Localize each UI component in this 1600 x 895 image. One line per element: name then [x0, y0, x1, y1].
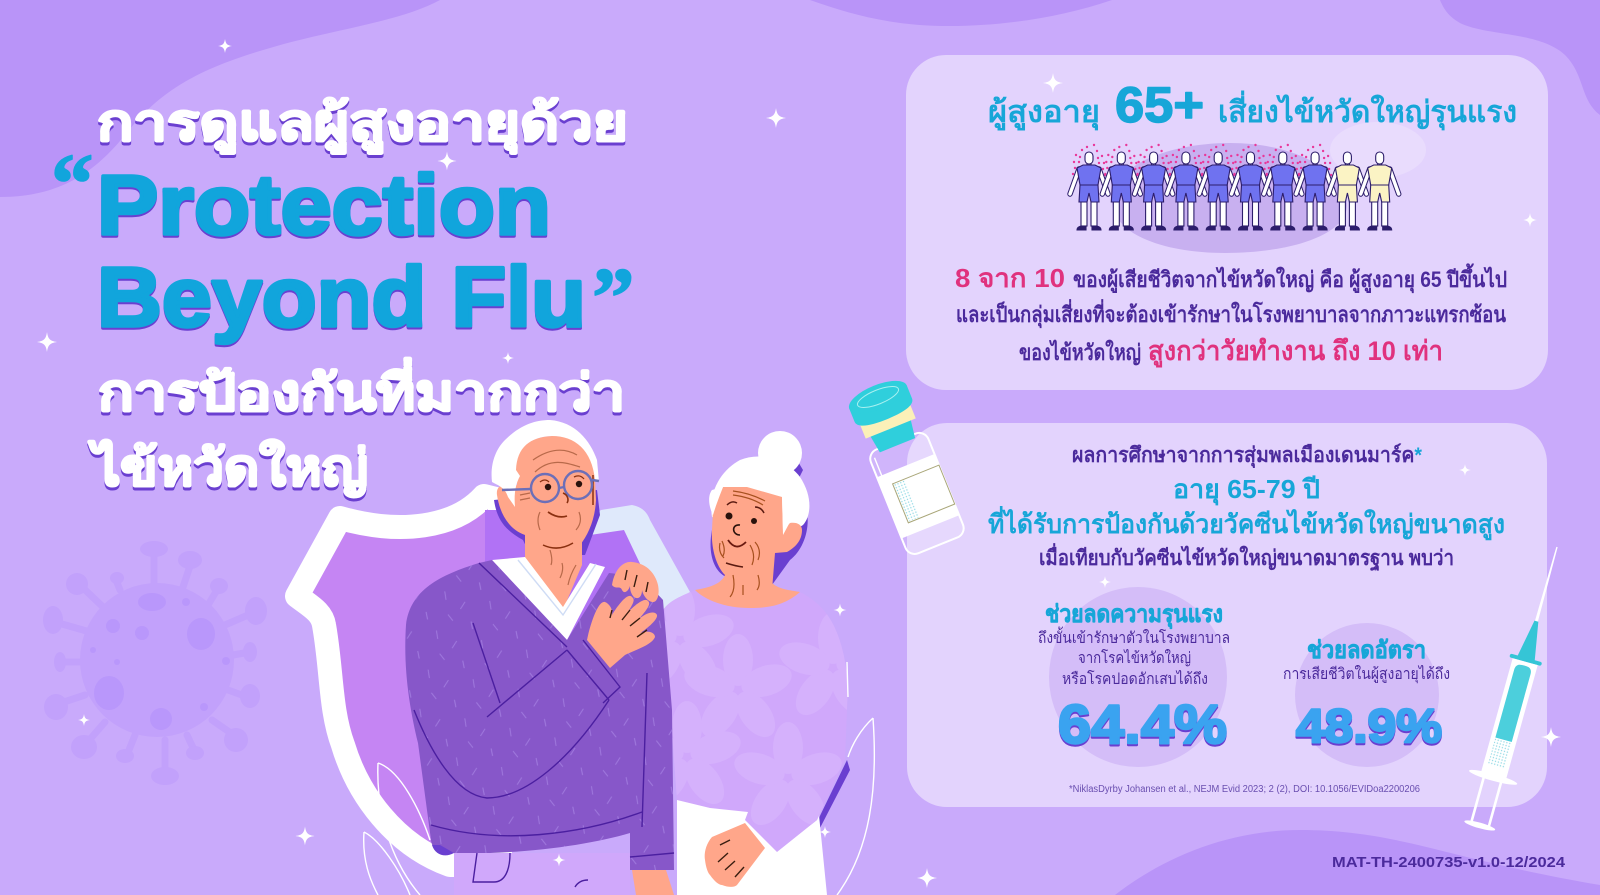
stat: severity reduction 64.4%: หรือโรคปอดอักเสบได้ถึง — [1062, 670, 1208, 688]
material code: MAT-TH-2400735-v1.0-12/2024 — [1332, 855, 1565, 871]
heading: 65+ risk: เสี่ยงไข้หวัดใหญ่รุนแรง — [1218, 90, 1517, 131]
text: study description: ผลการศึกษาจากการสุ่มพลเมืองเดนมาร์ค* — [1072, 443, 1423, 469]
leaf outlines: left — [364, 763, 430, 895]
background blob: top left — [0, 0, 440, 197]
text: study description: อายุ 65-79 ปี — [1173, 474, 1320, 506]
stat: mortality reduction 48.9%: 48.9% — [1296, 699, 1442, 752]
title: main heading: Beyond Flu — [97, 250, 586, 344]
text: study description: เมื่อเทียบกับวัคซีนไข้หวัดใหญ่ขนาดมาตรฐาน พบว่า — [1039, 542, 1454, 572]
text: study description: ที่ได้รับการป้องกันด้วยวัคซีนไข้หวัดใหญ่ขนาดสูง — [988, 505, 1505, 541]
panel: risk panel — [906, 55, 1548, 390]
stat: severity reduction 64.4%: จากโรคไข้หวัดใหญ่ — [1078, 649, 1191, 667]
text: risk statement: ของไข้หวัดใหญ่ — [1019, 339, 1141, 366]
title: main heading: Protection — [97, 158, 551, 252]
shield — [297, 496, 690, 865]
stat: mortality reduction 48.9%: ช่วยลดอัตรา — [1307, 637, 1426, 664]
heading: 65+ risk — [988, 77, 1517, 133]
soft highlight in risk panel — [1330, 122, 1426, 178]
text: risk statement: 8 จาก 10 — [955, 263, 1065, 293]
heading: 65+ risk: 65+ — [1115, 77, 1204, 133]
title: main heading — [51, 95, 634, 497]
stat: severity reduction 64.4%: ช่วยลดความรุนแรง — [1045, 601, 1223, 630]
illustration: woman — [664, 431, 850, 895]
background blob: top centre — [810, 0, 1112, 26]
stat: severity reduction 64.4%: 64.4% — [1058, 693, 1227, 755]
stat: mortality reduction 48.9% — [1283, 623, 1450, 767]
text: risk statement: และเป็นกลุ่มเสี่ยงที่จะต้องเข้ารักษาในโรงพยาบาลจากภาวะแทรกซ้อน — [956, 298, 1506, 329]
title: main heading: ” — [592, 251, 634, 345]
heading: 65+ risk: ผู้สูงอายุ — [988, 96, 1100, 131]
footnote: *NiklasDyrby Johansen et al., NEJM Evid 2023; 2 (2), DOI: 10.1056/EVIDoa2200206 — [1069, 784, 1420, 795]
text: study description — [988, 443, 1505, 572]
title: main heading: การดูแลผู้สูงอายุด้วย — [97, 95, 628, 154]
text: risk statement: ของผู้เสียชีวิตจากไข้หวัดใหญ่ คือ ผู้สูงอายุ 65 ปีขึ้นไป — [1073, 263, 1507, 294]
title: main heading: “ — [51, 137, 94, 231]
icon: virus — [43, 541, 267, 785]
pictogram: 8 of 10 people at risk — [1070, 144, 1399, 230]
title: main heading: ไข้หวัดใหญ่ — [88, 439, 368, 497]
background blob: top right — [1440, 0, 1600, 115]
background blob: bottom right — [1115, 830, 1600, 895]
leaf outlines: right — [837, 662, 874, 895]
stat: severity reduction 64.4% — [1038, 587, 1230, 767]
panel: study panel — [907, 423, 1547, 807]
stat: severity reduction 64.4%: ถึงขั้นเข้ารักษาตัวในโรงพยาบาล — [1038, 626, 1230, 647]
text: risk statement: สูงกว่าวัยทำงาน ถึง 10 เท่า — [1148, 336, 1443, 368]
illustration: man — [405, 420, 674, 895]
title: main heading: การป้องกันที่มากกว่า — [98, 358, 625, 421]
icon: syringe — [1455, 540, 1581, 835]
text: risk statement — [955, 263, 1507, 368]
stat: mortality reduction 48.9%: การเสียชีวิตในผู้สูงอายุได้ถึง — [1283, 665, 1450, 684]
icon: vial — [845, 374, 967, 557]
blob behind figures — [1112, 143, 1347, 253]
